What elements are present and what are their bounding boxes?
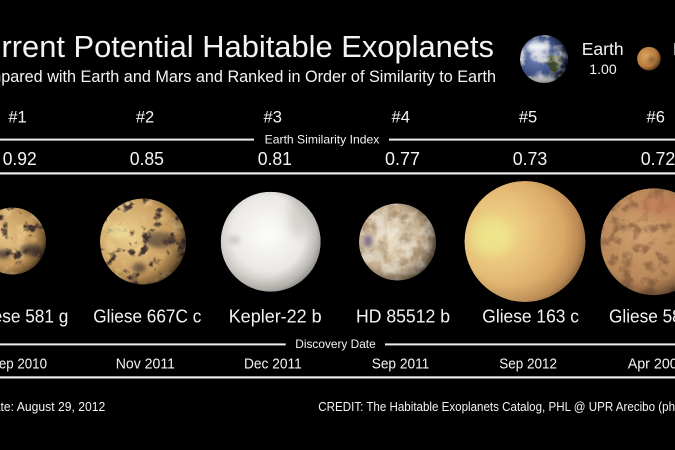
planet: Kepler-22 b — [221, 192, 321, 292]
value 0.73: 0.73 — [513, 148, 547, 169]
heading: Earth Similarity Index: Earth Similarity Index — [265, 132, 379, 146]
rank 6: #6 — [647, 109, 665, 127]
rank 3: #3 — [264, 109, 282, 127]
name: Gliese 163 c: Gliese 163 c — [482, 307, 579, 327]
rank 5: #5 — [519, 109, 537, 127]
date: Sep 2011: Sep 2011 — [372, 355, 429, 372]
planet: Gliese 581 d — [600, 188, 675, 295]
name: Kepler-22 b: Kepler-22 b — [229, 307, 322, 327]
planet: HD 85512 b — [359, 204, 436, 280]
rank 1: #1 — [8, 109, 27, 127]
date: Sep 2012: Sep 2012 — [499, 355, 557, 372]
rank 4: #4 — [392, 109, 410, 127]
similarity values row — [3, 148, 675, 169]
rank 2: #2 — [136, 109, 154, 127]
icon: Mars reference planet — [637, 47, 661, 70]
heading: Discovery Date: Discovery Date — [295, 337, 376, 351]
discovery dates row — [0, 355, 675, 372]
value: Earth index: 1.00 — [589, 62, 617, 77]
name: Gliese 667C c: Gliese 667C c — [93, 307, 201, 327]
value 0.85: 0.85 — [130, 148, 164, 169]
planet: Gliese 163 c — [464, 181, 586, 302]
date: Nov 2011: Nov 2011 — [116, 355, 175, 372]
planet names row — [0, 307, 675, 327]
value 0.77: 0.77 — [385, 148, 420, 169]
rank row — [8, 109, 665, 127]
date: Dec 2011: Dec 2011 — [244, 355, 302, 372]
label: Earth: Earth — [582, 39, 624, 59]
value 0.92: 0.92 — [3, 148, 37, 169]
planet: Gliese 667C c — [100, 198, 186, 284]
name: HD 85512 b: HD 85512 b — [356, 307, 450, 327]
icon: Earth reference planet — [520, 35, 568, 84]
value 0.81: 0.81 — [258, 148, 292, 169]
planet: Gliese 581 g — [0, 208, 46, 274]
